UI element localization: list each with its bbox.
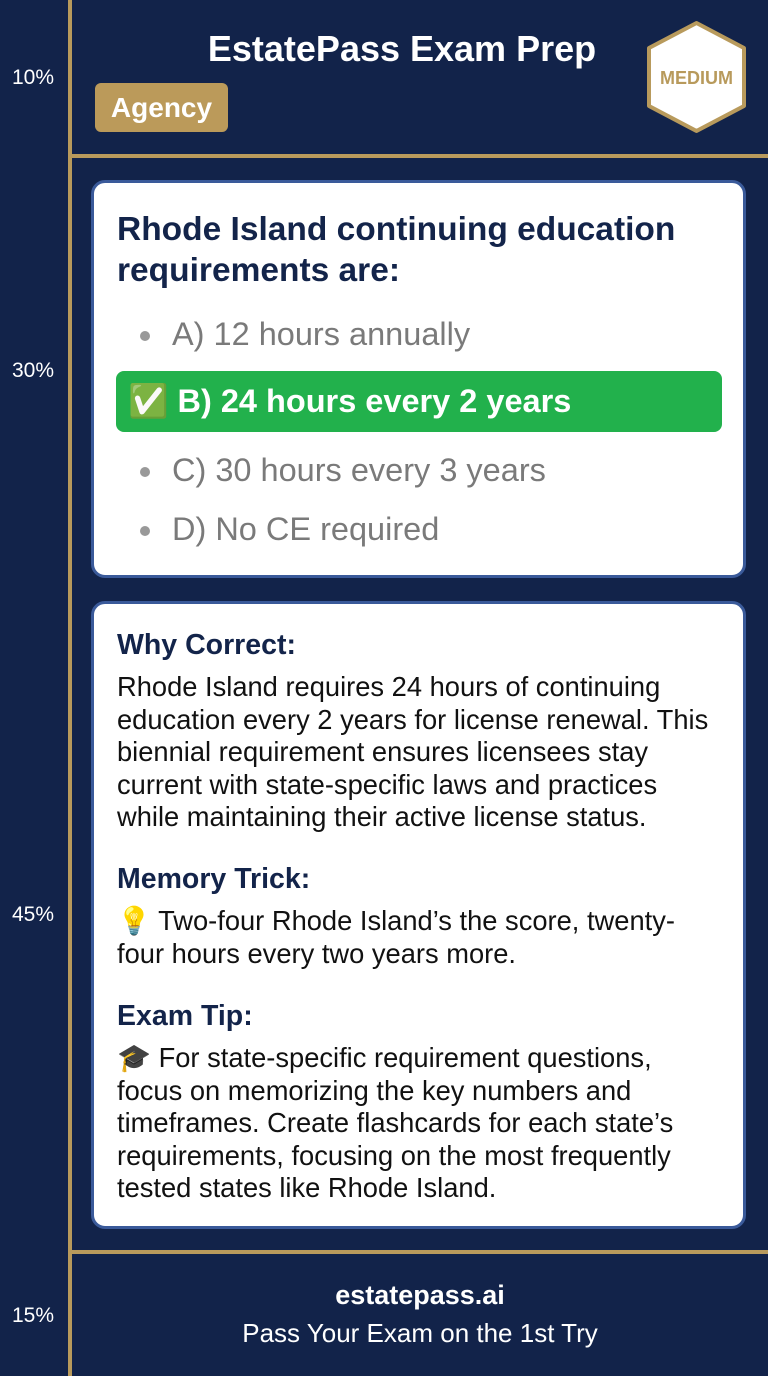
heading: why correct: Why Correct: — [117, 629, 296, 661]
text: exam tip — [117, 1042, 673, 1203]
heading: memory trick: Memory Trick: — [117, 863, 310, 895]
text: exam tip: timeframes. Create flashcards for each state’s — [117, 1107, 673, 1138]
label: 30%: 30% — [12, 359, 54, 382]
badge: Agency — [95, 83, 228, 132]
badge: difficulty hexagon: MEDIUM — [660, 68, 733, 88]
text: why correct: biennial requirement ensures licensees stay — [117, 736, 648, 767]
badge: difficulty hexagon — [647, 21, 746, 133]
text: why correct: current with state-specific laws and practices — [117, 768, 657, 800]
text: why correct: Rhode Island requires 24 hours of continuing — [117, 671, 660, 702]
left gold rule — [68, 0, 72, 1376]
text: why correct — [117, 671, 708, 832]
text: memory trick: four hours every two years more. — [117, 938, 516, 968]
text: exam tip: focus on memorizing the key numbers and — [117, 1074, 631, 1106]
title: EstatePass Exam Prep — [208, 28, 596, 69]
header divider — [68, 154, 768, 158]
question heading: Rhode Island continuing education — [117, 211, 675, 248]
text: why correct: education every 2 years for license renewal. This — [117, 704, 708, 734]
text: why correct: while maintaining their active license status. — [117, 801, 647, 832]
text: exam tip: requirements, focusing on the most frequently — [117, 1140, 671, 1170]
text: exam tip: tested states like Rhode Island. — [117, 1172, 496, 1203]
heading: exam tip: Exam Tip: — [117, 1000, 253, 1032]
question heading — [117, 211, 675, 289]
badge: Agency: Agency — [111, 92, 212, 123]
question heading: requirements are: — [117, 252, 400, 289]
option B correct — [116, 371, 722, 432]
option B correct: ✅ B) 24 hours every 2 years — [128, 383, 571, 419]
label: 45%: 45% — [12, 903, 54, 926]
footer tagline: Pass Your Exam on the 1st Try — [242, 1318, 598, 1348]
footer divider — [68, 1250, 768, 1254]
text: exam tip: 🎓 For state-specific requirement questions, — [117, 1042, 652, 1073]
option A: A) 12 hours annually — [172, 316, 470, 352]
label: 15%: 15% — [12, 1304, 54, 1327]
panel: question — [91, 180, 746, 578]
footer site: estatepass.ai — [335, 1280, 505, 1310]
panel: explanation — [91, 601, 746, 1229]
label: 10%: 10% — [12, 66, 54, 89]
text: memory trick: 💡 Two-four Rhode Island’s the score, twenty- — [117, 905, 675, 936]
text: memory trick — [117, 905, 675, 969]
option D: D) No CE required — [172, 511, 439, 547]
option C: C) 30 hours every 3 years — [172, 452, 546, 488]
